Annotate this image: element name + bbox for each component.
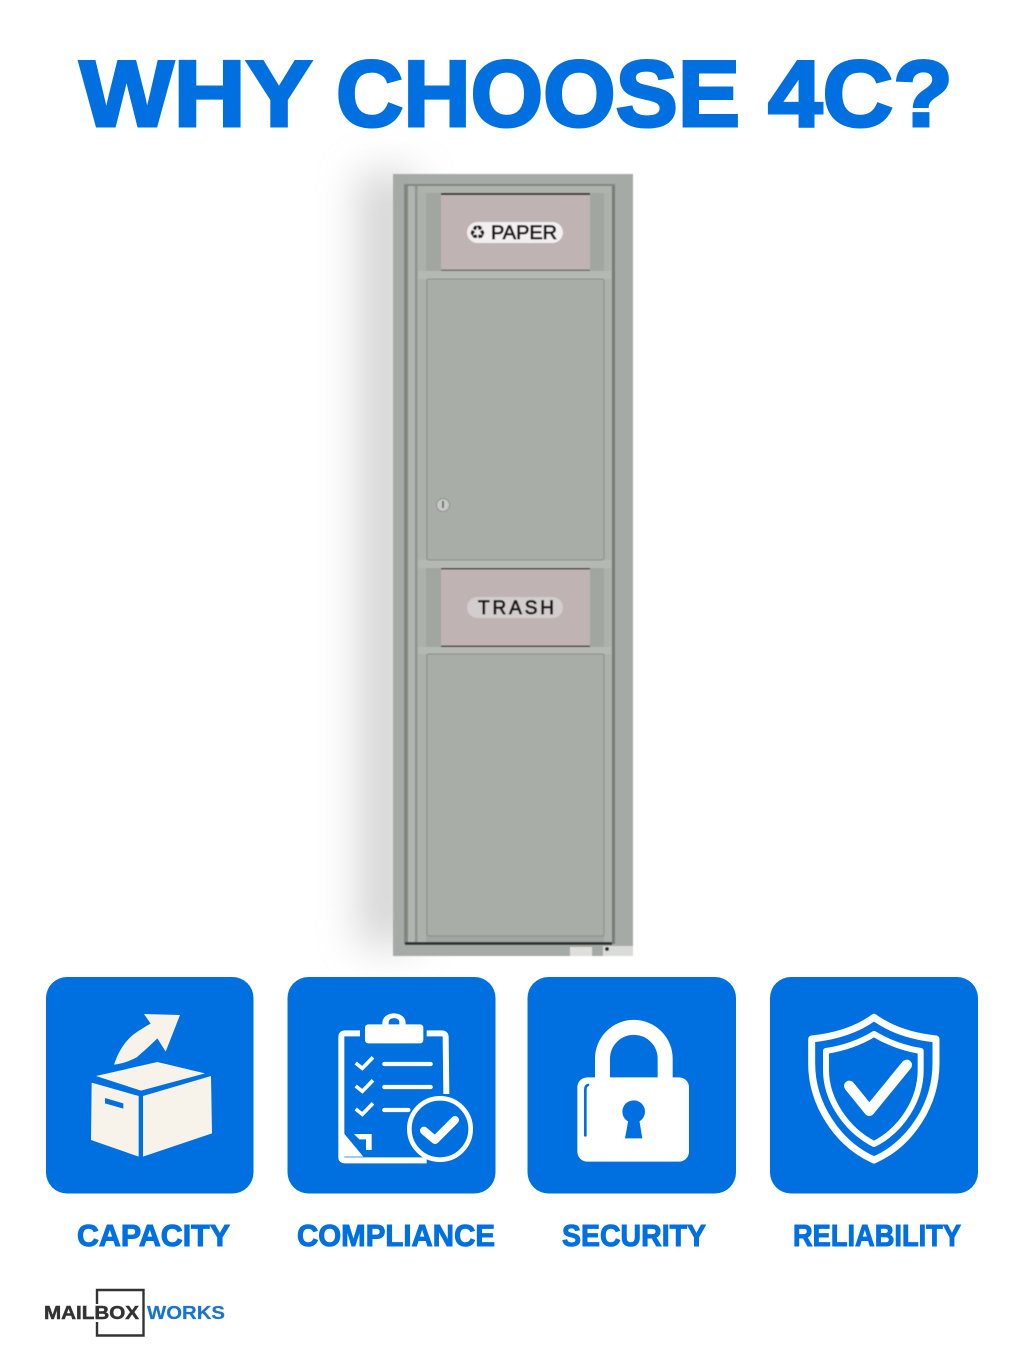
logo: Mailbox Works bbox=[44, 1290, 225, 1336]
flap: trash bbox=[441, 568, 590, 647]
title: CHOOSE bbox=[336, 41, 740, 146]
label: capacity: CAPACITY bbox=[77, 1218, 230, 1253]
label: paper bbox=[467, 222, 563, 244]
icon: shield with check bbox=[812, 1017, 936, 1160]
product: collection cabinet bbox=[393, 174, 633, 956]
title: 4C? bbox=[768, 41, 953, 146]
icon: box with arrow bbox=[91, 1014, 212, 1157]
label: trash: TRASH bbox=[478, 598, 554, 619]
logo: Mailbox Works: WORKS bbox=[147, 1302, 225, 1323]
label: compliance: COMPLIANCE bbox=[297, 1218, 495, 1253]
door lock bbox=[436, 498, 450, 512]
label: security: SECURITY bbox=[562, 1218, 706, 1253]
label: paper: ♻ bbox=[469, 222, 486, 244]
tile: security bbox=[528, 977, 736, 1194]
tile: reliability bbox=[770, 977, 978, 1194]
compliance stickers bbox=[570, 946, 633, 956]
tile: compliance bbox=[288, 977, 496, 1194]
flap: paper bbox=[441, 193, 590, 271]
label: paper: PAPER bbox=[491, 223, 557, 244]
logo: Mailbox Works: MAILBOX bbox=[44, 1302, 140, 1323]
door: upper bbox=[427, 279, 604, 560]
door: lower bbox=[427, 654, 604, 936]
title: WHY bbox=[80, 41, 312, 146]
tile: capacity bbox=[46, 977, 254, 1194]
label: reliability: RELIABILITY bbox=[793, 1218, 961, 1253]
cabinet shadow bbox=[358, 172, 415, 946]
icon: padlock bbox=[577, 1027, 689, 1162]
icon: clipboard with check bbox=[341, 1013, 471, 1160]
